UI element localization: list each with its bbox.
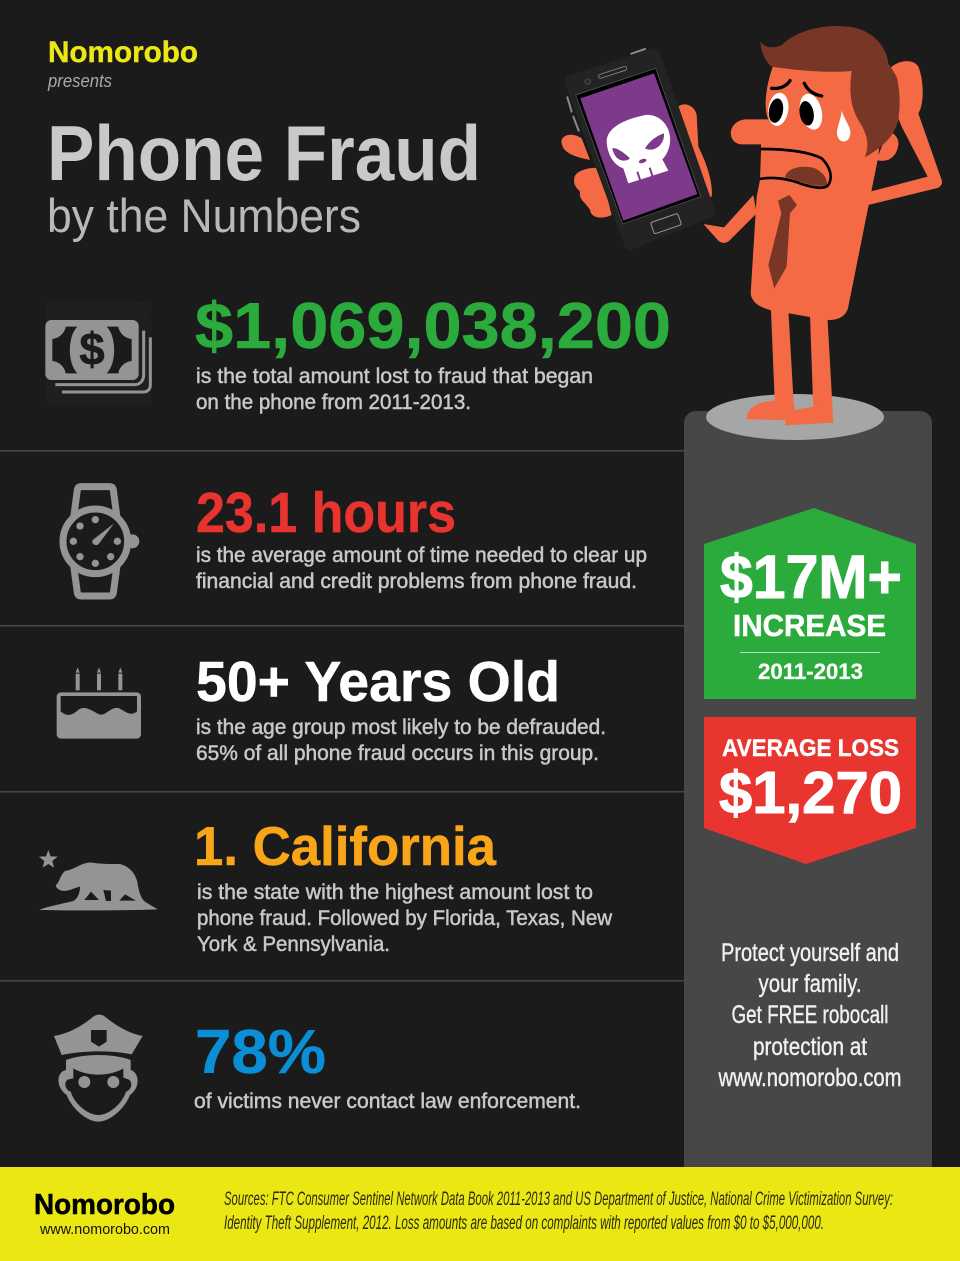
phone: body — [571, 54, 709, 244]
description: is the age group most likely to be defrauded. — [196, 716, 606, 739]
description: is the total amount lost to fraud that began — [196, 365, 593, 388]
description: financial and credit problems from phone fraud. — [196, 570, 637, 593]
man: legs and feet — [747, 303, 833, 425]
stat 3: age group — [57, 650, 606, 765]
stat figure: 78% — [195, 1018, 326, 1087]
presents label: presents — [47, 71, 112, 91]
phone: home button — [650, 213, 682, 234]
illustration: worried man holding phone — [562, 26, 942, 425]
stat 4: top state — [39, 815, 613, 956]
call to action text: Get FREE robocall — [732, 1001, 888, 1029]
stat figure: 1. California — [194, 815, 496, 877]
stat figure: $1,069,038,200 — [195, 289, 671, 362]
man: arms and raised hand — [703, 61, 942, 243]
badge: average loss — [704, 717, 916, 864]
stat 5: law enforcement — [54, 1015, 581, 1122]
icon: birthday cake — [57, 667, 141, 739]
icon: stack of money — [45, 302, 151, 406]
footer logo: Nomorobo — [34, 1189, 175, 1221]
description: 65% of all phone fraud occurs in this group. — [196, 742, 599, 765]
pedestal column — [684, 411, 932, 1181]
header: brand and title — [47, 36, 481, 242]
description: is the average amount of time needed to clear up — [196, 544, 647, 567]
badge shape — [704, 508, 916, 699]
badge label: AVERAGE LOSS — [722, 735, 899, 762]
icon: police officer — [54, 1015, 143, 1122]
badge: increase — [704, 508, 916, 699]
description: phone fraud. Followed by Florida, Texas, New — [197, 907, 613, 930]
phone: screen — [576, 68, 701, 224]
badge years: 2011-2013 — [758, 659, 863, 684]
man: hair — [761, 26, 900, 157]
man: tie — [768, 195, 797, 288]
footer url: www.nomorobo.com — [39, 1221, 170, 1238]
title: Phone Fraud — [47, 109, 481, 197]
badge label: INCREASE — [733, 608, 886, 643]
phone: skull icon — [607, 115, 670, 183]
icon: California bear and star — [39, 850, 158, 910]
phone — [567, 49, 709, 244]
call to action text: your family. — [758, 970, 862, 998]
badge figure: $1,270 — [719, 760, 902, 826]
badge shape — [704, 717, 916, 864]
phone: speaker and camera — [584, 66, 627, 85]
call to action text: Protect yourself and — [721, 939, 899, 967]
man: head and torso — [731, 60, 887, 320]
footer band — [0, 1167, 960, 1261]
description: York & Pennsylvania. — [197, 933, 390, 956]
man: sweat drop — [837, 111, 850, 141]
call to action text: protection at — [753, 1033, 867, 1061]
stat figure: 50+ Years Old — [196, 650, 560, 714]
icon: wristwatch — [63, 487, 139, 596]
man: rear hand behind phone — [562, 104, 712, 218]
brand name: Nomorobo — [48, 36, 198, 69]
description: is the state with the highest amount lost to — [197, 881, 593, 904]
man: eyebrows — [772, 81, 822, 96]
description: of victims never contact law enforcement. — [194, 1090, 581, 1113]
phone: side buttons — [567, 49, 645, 131]
stat 2: hours — [63, 481, 647, 596]
call to action text: www.nomorobo.com — [718, 1064, 902, 1092]
stat 1: total lost — [45, 289, 671, 414]
icon: stack of money: $ — [79, 324, 105, 375]
description: on the phone from 2011-2013. — [196, 391, 471, 414]
pedestal spotlight disc — [706, 394, 884, 440]
stat figure: 23.1 hours — [196, 481, 456, 545]
man: eyes — [766, 91, 826, 132]
badge figure: $17M+ — [720, 543, 902, 611]
subtitle: by the Numbers — [47, 189, 361, 242]
man: open mouth — [760, 149, 831, 188]
